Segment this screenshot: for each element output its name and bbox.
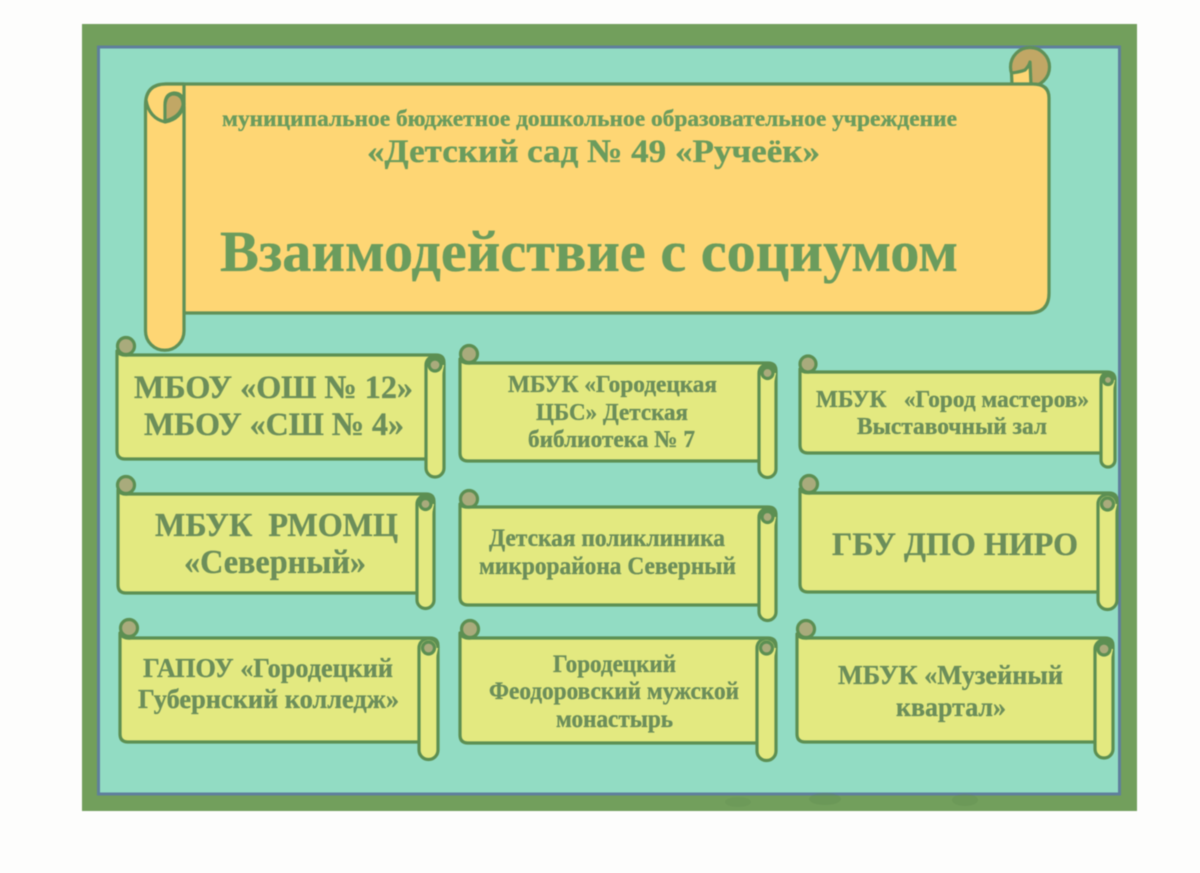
icon: top right scroll curl (1010, 48, 1050, 86)
subtitle: kindergarten name: «Детский сад № 49 «Ручеёк» (367, 134, 820, 170)
scroll: Feodorovsky monastery: монастырь (556, 706, 673, 733)
scroll: GBU DPO NIRO: ГБУ ДПО НИРО (832, 527, 1078, 563)
scroll: Children's clinic: микрорайона Северный (479, 553, 736, 580)
scroll: МБОУ schools (117, 338, 444, 477)
scroll: City of Masters: Выставочный зал (857, 414, 1047, 440)
scroll: МБОУ schools: МБОУ «СШ № 4» (144, 407, 404, 443)
scroll: Gorodets library (460, 346, 776, 478)
scroll: GBU DPO NIRO (800, 476, 1117, 610)
scroll: Gubernsky College (120, 620, 438, 760)
icon: left scroll roll (146, 84, 184, 350)
scroll: Gorodets library: МБУК «Городецкая (508, 372, 717, 398)
scroll body (165, 84, 1049, 313)
scroll: Feodorovsky monastery: Городецкий (553, 651, 676, 678)
scroll: Feodorovsky monastery (460, 620, 776, 761)
scroll: City of Masters (800, 356, 1115, 467)
scroll: RMOMC Severny (118, 476, 434, 608)
scroll: Gorodets library: библиотека № 7 (528, 427, 695, 453)
icon: left scroll curl (146, 93, 184, 122)
subtitle: institution type: муниципальное бюджетное дошкольное образовательное учреждение (222, 106, 957, 131)
scroll: Museum Quarter (797, 620, 1113, 758)
scroll: Feodorovsky monastery: Феодоровский мужской (489, 678, 739, 705)
scroll: RMOMC Severny: МБУК РМОМЦ (155, 507, 398, 544)
panel: main title scroll (146, 48, 1050, 350)
scroll: МБОУ schools: МБОУ «ОШ № 12» (134, 370, 413, 406)
scroll: Museum Quarter: МБУК «Музейный (838, 660, 1063, 690)
scroll: Gubernsky College: ГАПОУ «Городецкий (143, 653, 393, 683)
title: Взаимодействие с социумом (220, 219, 958, 284)
scroll: Gorodets library: ЦБС» Детская (536, 400, 688, 426)
scroll: Children's clinic: Детская поликлиника (489, 525, 725, 552)
scroll: Museum Quarter: квартал» (896, 692, 1006, 722)
scroll: RMOMC Severny: «Северный» (184, 544, 366, 581)
scroll: Gubernsky College: Губернский колледж» (138, 684, 399, 714)
scroll: Children's clinic (460, 490, 776, 620)
frame: green border with blue line and teal background (82, 24, 1137, 811)
scroll: City of Masters: МБУК «Город мастеров» (816, 387, 1089, 413)
